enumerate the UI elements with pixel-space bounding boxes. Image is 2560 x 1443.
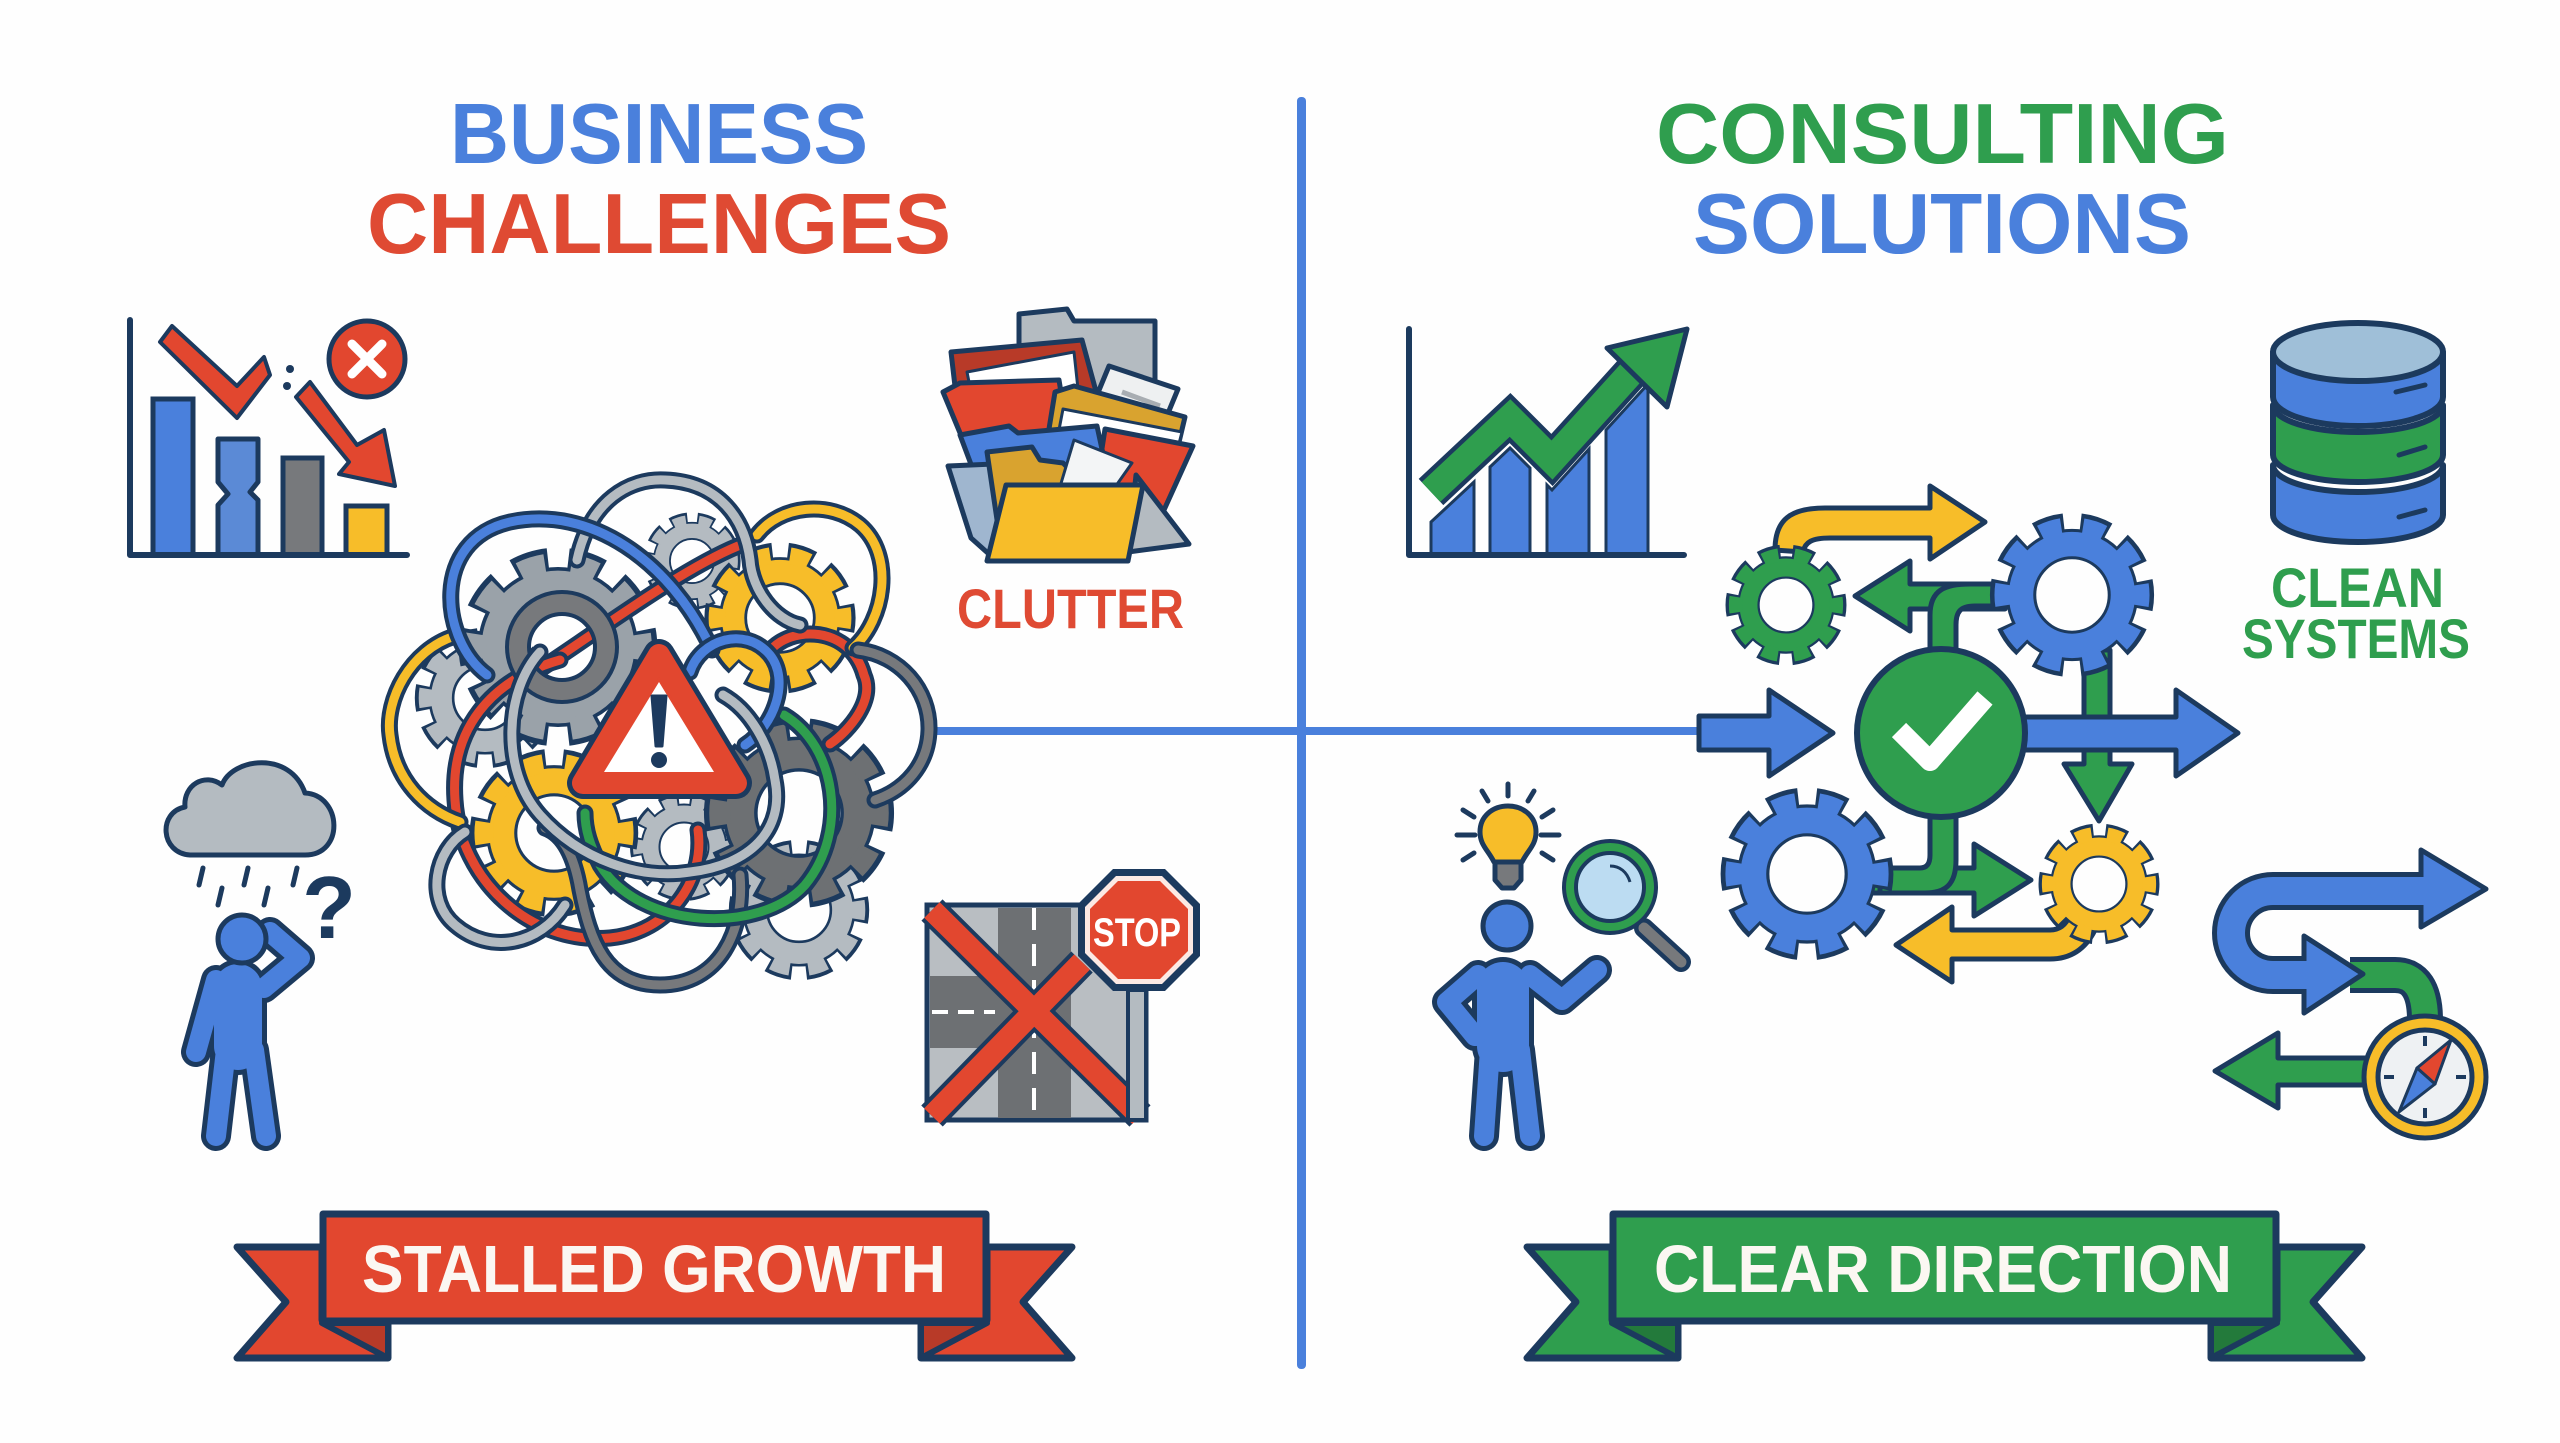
arrow: blue incoming: [1699, 690, 1833, 776]
icon: warning triangle: [583, 655, 736, 783]
question mark: ?: [302, 858, 356, 957]
tangled wires: [389, 480, 929, 985]
vertical divider: [1297, 97, 1306, 1369]
light bulb: [1457, 784, 1559, 888]
person head: [218, 915, 266, 963]
label: clutter: CLUTTER: [957, 577, 1184, 640]
icon: database: [2273, 323, 2443, 542]
label: clean systems: [2242, 556, 2470, 670]
icon: green check circle: [1857, 649, 2025, 817]
person head: [1483, 902, 1531, 950]
heading: consulting solutions: SOLUTIONS: [1693, 177, 2191, 272]
banner: stalled growth: [237, 1214, 1072, 1358]
panel: consulting solutions: [1409, 87, 2486, 1358]
arrow: yellow top: [1775, 486, 1985, 559]
icon: blocked road with stop sign: STOP: [1093, 911, 1181, 955]
icon: confused person under rain cloud: [166, 763, 356, 1136]
icon: cluttered folders: [943, 309, 1193, 561]
person body: [196, 932, 300, 1136]
connector: green up: [1930, 584, 2000, 650]
arrow: green lower right: [1870, 844, 2031, 916]
magnifier: [1570, 847, 1681, 962]
gear: blue upper: [2003, 526, 2141, 664]
label: clean systems: SYSTEMS: [2242, 607, 2470, 670]
banner: clear direction: CLEAR DIRECTION: [1654, 1232, 2232, 1307]
person body: [1447, 970, 1597, 1136]
heading: business challenges: [367, 87, 951, 272]
banner: clear direction: [1527, 1214, 2362, 1358]
heading: consulting solutions: CONSULTING: [1656, 87, 2229, 182]
arrow: green left: [1855, 561, 2005, 631]
arrow: yellow bottom: [1896, 907, 2095, 982]
horizontal connector line: [925, 727, 1705, 735]
arrow: green down: [2064, 650, 2132, 821]
rain cloud: [166, 763, 334, 905]
gear: blue lower: [1734, 801, 1880, 947]
icon: person with idea and magnifier: [1447, 784, 1681, 1136]
blue winding arrow: [2231, 850, 2486, 1013]
icon: growth chart: [1409, 329, 1687, 555]
gear: green: [1735, 554, 1837, 656]
heading: business challenges: CHALLENGES: [367, 177, 951, 272]
compass: [2364, 1016, 2486, 1138]
green curved path: [2350, 975, 2425, 1020]
banner: stalled growth: STALLED GROWTH: [362, 1232, 946, 1307]
light and dark gears: [426, 520, 879, 969]
panel: business challenges: [130, 87, 1200, 1358]
gear: yellow: [2048, 833, 2150, 935]
icon: winding path with compass: [2215, 850, 2486, 1138]
tangle of gears and wires with warning: [389, 480, 929, 985]
arrow: blue outgoing: [2020, 690, 2238, 776]
heading: business challenges: BUSINESS: [450, 87, 868, 182]
green left arrow: [2215, 1033, 2375, 1108]
icon: declining bar chart: [130, 320, 407, 555]
icon: blocked road with stop sign: [927, 869, 1200, 1120]
heading: consulting solutions: [1656, 87, 2229, 272]
label: clean systems: CLEAN: [2271, 556, 2444, 619]
process flow: gears and arrows: [1699, 486, 2238, 982]
connector: green down: [1880, 815, 1956, 893]
